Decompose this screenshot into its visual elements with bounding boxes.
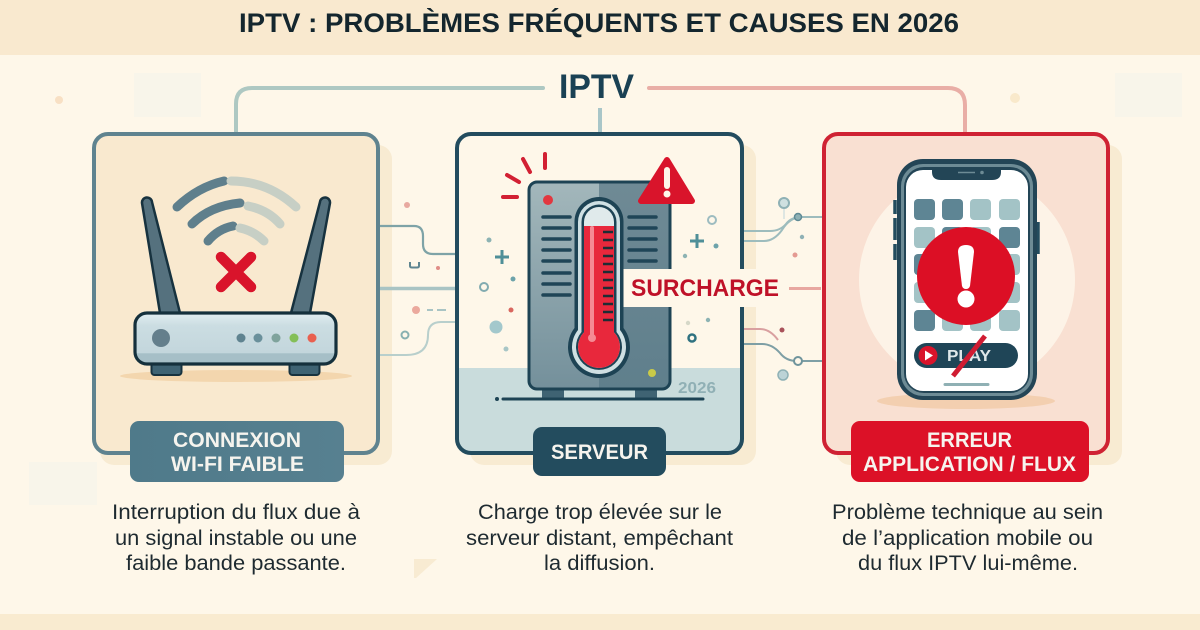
label: erreur application / flux [851, 421, 1089, 482]
text: app description [832, 500, 1103, 575]
text: wi-fi description: faible bande passante. [126, 551, 346, 575]
panel: Wi-Fi connection [94, 134, 392, 482]
label: surcharge [623, 269, 779, 307]
label: connexion wi-fi faible: WI-FI FAIBLE [171, 453, 304, 476]
text: app description: Problème technique au sein [832, 500, 1103, 524]
icon: warning triangle [641, 160, 692, 201]
connectors between panel 1 and panel 2 [380, 202, 455, 355]
play button: PLAY [947, 348, 992, 365]
icon: red exclamation badge [917, 227, 1015, 325]
panel: app or stream error [824, 134, 1122, 482]
header band with title: IPTV : PROBLÈMES FRÉQUENTS ET CAUSES EN 2026 [239, 7, 959, 38]
play button [914, 336, 1018, 376]
IPTV hub heading with connectors [236, 68, 965, 133]
label: serveur: SERVEUR [551, 441, 648, 464]
label: erreur application / flux: ERREUR [927, 429, 1012, 452]
text: wi-fi description [112, 500, 360, 575]
header band with title [0, 0, 1200, 55]
icon: thermometer [568, 197, 630, 378]
text: wi-fi description: Interruption du flux due à [112, 500, 360, 524]
panel: server overload [457, 134, 779, 476]
icon: heat marks [503, 154, 545, 197]
app tiles [914, 199, 1020, 331]
icon: smartphone [895, 159, 1038, 400]
text: server description [466, 500, 733, 575]
decorative sparks [480, 216, 718, 352]
icon: server unit [495, 182, 703, 401]
connectors between panel 2 and panel 3 [744, 198, 822, 380]
text: 2026: 2026 [678, 380, 716, 397]
icon: router [120, 197, 352, 382]
label: erreur application / flux: APPLICATION / FLUX [863, 453, 1076, 476]
text: server description: Charge trop élevée sur le [478, 500, 722, 524]
label: serveur [533, 427, 666, 476]
text: app description: du flux IPTV lui-même. [858, 551, 1078, 575]
icon: red cross [221, 257, 251, 287]
label: surcharge: SURCHARGE [631, 275, 779, 302]
label: connexion wi-fi faible [130, 421, 344, 482]
IPTV hub heading with connectors: IPTV [559, 68, 634, 106]
text: app description: de l’application mobile ou [842, 526, 1093, 550]
text: server description: la diffusion. [544, 551, 655, 575]
icon: broken wifi signal [177, 181, 296, 241]
text: wi-fi description: un signal instable ou une [115, 526, 357, 550]
text: server description: serveur distant, empêchant [466, 526, 733, 550]
footer band [0, 614, 1200, 630]
label: connexion wi-fi faible: CONNEXION [173, 429, 301, 452]
